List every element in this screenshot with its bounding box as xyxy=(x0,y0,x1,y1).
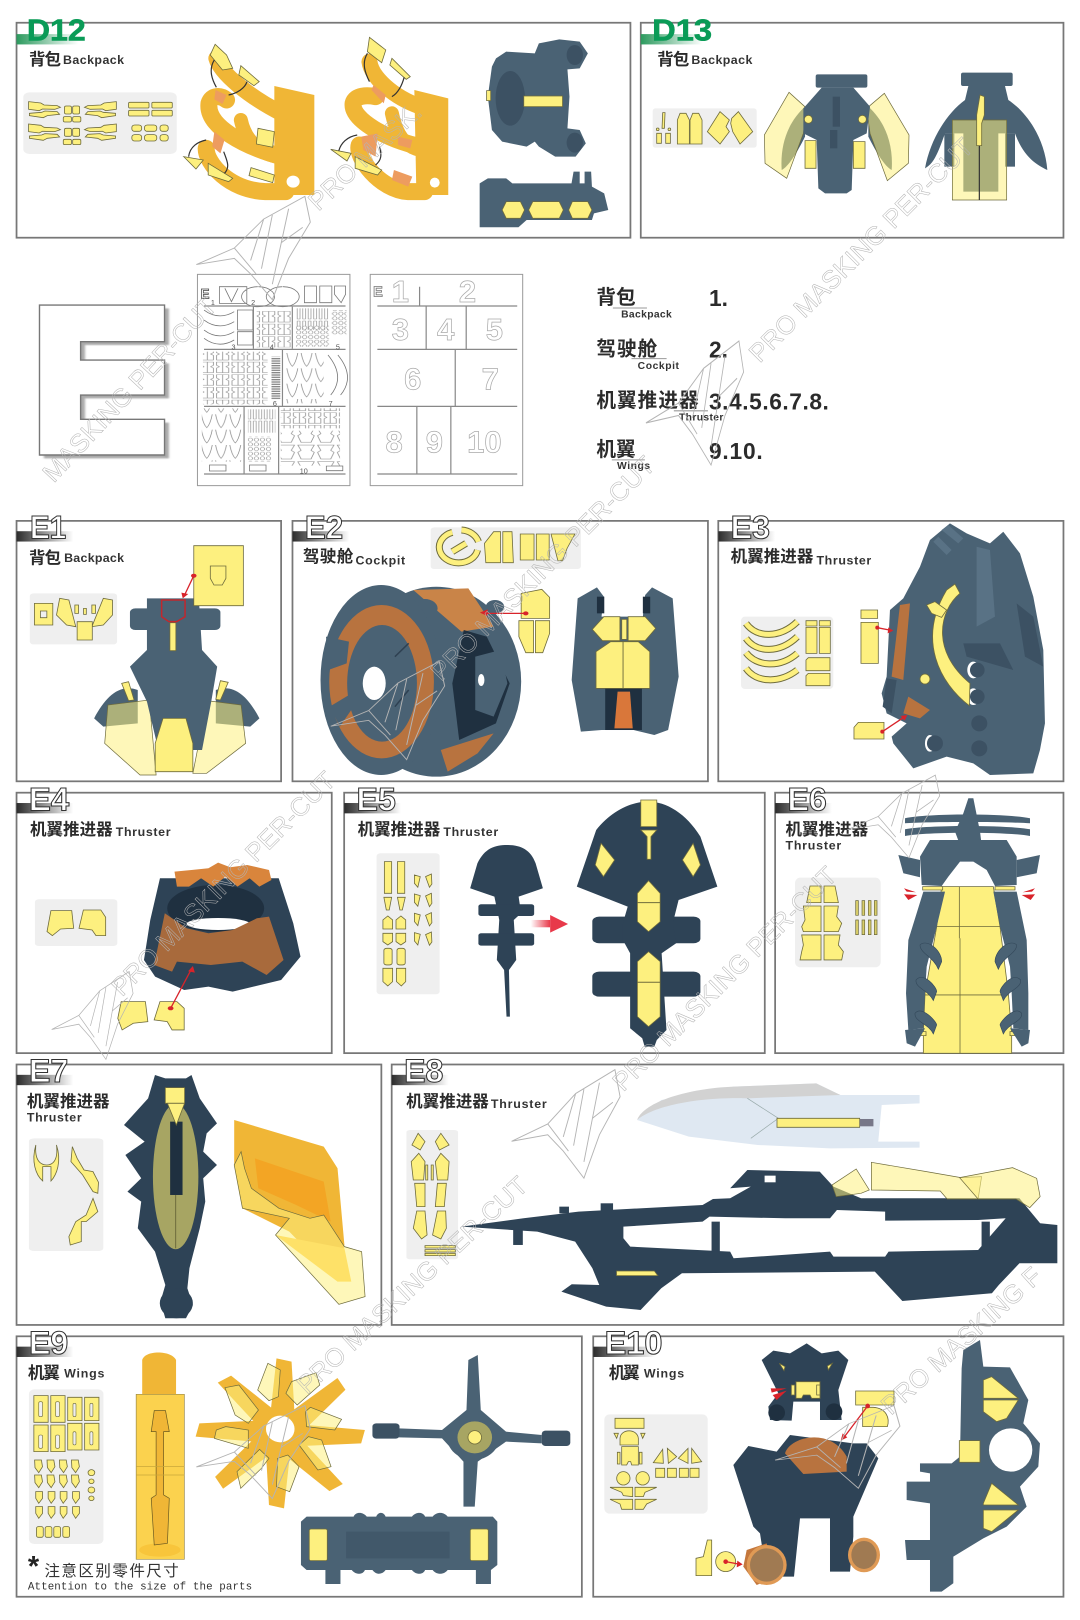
sheet of numbered sections: 4 xyxy=(437,312,455,347)
mask swatch D12 xyxy=(23,92,177,154)
panel titles: 机翼推进器 xyxy=(406,1092,489,1111)
size attention note: Attention to the size of the parts xyxy=(28,1582,252,1594)
sheet of numbered sections: 1 xyxy=(392,274,409,309)
mask E2 with arrow xyxy=(480,589,550,653)
sheet overview labels: 1 xyxy=(211,298,215,307)
panel titles: Cockpit xyxy=(356,553,405,567)
cockpit front view xyxy=(572,587,679,735)
orange part 2 xyxy=(331,37,448,195)
panel titles: Wings xyxy=(644,1367,684,1381)
mask swatch E5 xyxy=(377,853,440,994)
panel titles: 背包 xyxy=(657,49,690,69)
sheet of numbered sections: 5 xyxy=(486,312,503,347)
panel titles xyxy=(27,49,871,1383)
E7 thruster xyxy=(124,1075,217,1318)
sheet of numbered sections: 7 xyxy=(482,362,499,397)
E7 orange part with masks xyxy=(234,1120,365,1304)
sheet of numbered sections: 2 xyxy=(459,274,476,309)
panel: E4 and E5 parts xyxy=(35,800,717,1047)
legend: part name to section number: 背包 xyxy=(596,287,636,309)
mask swatch E4 xyxy=(35,899,117,946)
dark ring part xyxy=(487,39,588,157)
panel number labels: E2 xyxy=(305,509,343,545)
size attention note xyxy=(28,1551,252,1594)
panel: E3 parts xyxy=(741,523,1045,775)
thruster with masks xyxy=(898,798,1040,1053)
sheet overview labels: 7 xyxy=(329,399,333,408)
small thruster bars xyxy=(478,904,534,946)
legend: part name to section number: 机翼 xyxy=(596,439,636,461)
panel titles: Thruster xyxy=(443,825,498,839)
panel: D12 parts xyxy=(23,37,608,227)
sheet of numbered sections: 3 xyxy=(392,312,409,347)
sheet of numbered sections: 8 xyxy=(385,425,403,460)
masks E3 with arrows xyxy=(854,610,907,739)
E8 details and masks xyxy=(513,1162,1040,1276)
panel titles: Backpack xyxy=(691,53,752,67)
mask swatch E10 xyxy=(604,1414,708,1514)
mask swatch E2 xyxy=(431,527,581,569)
watermark text: PRO MASK. xyxy=(303,98,427,216)
panel: E9 parts xyxy=(29,1352,570,1584)
orange part 1 xyxy=(184,44,314,195)
panel titles: 机翼推进器 xyxy=(358,820,441,839)
slate cross part xyxy=(372,1355,570,1507)
panel titles: 驾驶舱 xyxy=(303,546,354,566)
dark holder with copper xyxy=(733,1435,880,1585)
sheet of numbered sections: 9 xyxy=(426,425,443,460)
watermark text: PRO MASKING F xyxy=(876,1262,1047,1420)
small dark part with red marks xyxy=(762,1343,848,1421)
panel number labels: E5 xyxy=(357,781,396,817)
large thruster with masks xyxy=(577,800,717,1047)
legend: part name to section number: 机翼推进器 xyxy=(596,390,699,412)
mask swatch E1 xyxy=(30,593,117,644)
masks and red arrow bottom xyxy=(696,1540,743,1576)
sheet overview labels: 5 xyxy=(336,342,340,351)
masks E4 with arrow xyxy=(118,966,195,1030)
sheet overview labels: 3 xyxy=(232,342,236,351)
sheet of numbered sections: 6 xyxy=(404,362,421,397)
panel titles: 机翼 xyxy=(28,1364,60,1383)
watermark logos xyxy=(52,196,940,1499)
panel number labels: E6 xyxy=(788,781,827,817)
panel titles: Thruster xyxy=(27,1110,82,1124)
sheet overview labels: 4 xyxy=(270,342,274,351)
panel titles: 机翼 xyxy=(609,1364,640,1383)
orange rod with mask xyxy=(136,1352,184,1559)
panel: D13 parts xyxy=(653,73,1047,200)
panel titles: Thruster xyxy=(491,1097,547,1111)
panel number labels xyxy=(27,12,827,1361)
size attention note: * xyxy=(28,1551,40,1583)
backpack part with masks xyxy=(94,598,259,775)
E8 long thruster body xyxy=(462,1170,1057,1310)
sheet overview labels: 10 xyxy=(300,466,308,475)
sheet overview labels: E xyxy=(200,287,209,302)
panel titles: Thruster xyxy=(785,839,841,853)
thruster cone xyxy=(144,863,301,992)
panel titles: Backpack xyxy=(63,53,124,67)
panel number labels: E9 xyxy=(29,1325,68,1361)
mask swatch E9 xyxy=(29,1389,103,1544)
mask swatch E7 xyxy=(29,1138,103,1251)
masks and red arrow top xyxy=(841,1391,894,1441)
panel titles: Backpack xyxy=(64,551,124,565)
panel: E10 parts xyxy=(604,1340,1040,1592)
mask swatch E3 xyxy=(741,617,833,689)
red arrow xyxy=(531,915,568,933)
panel titles: 机翼推进器 xyxy=(785,820,869,839)
panel titles: Wings xyxy=(64,1367,104,1381)
mask swatch E8 xyxy=(406,1130,458,1259)
legend: part name to section number: 驾驶舱 xyxy=(596,338,658,361)
size attention note: 注意区别零件尺寸 xyxy=(44,1561,179,1580)
watermark text: PRO MASKING PER-CUT xyxy=(608,862,843,1097)
sheet of numbered sections xyxy=(370,274,523,486)
legend: part name to section number: Cockpit xyxy=(638,361,680,372)
mask swatch E6 xyxy=(795,878,881,967)
panel number labels: E7 xyxy=(29,1053,68,1089)
panel number labels: E8 xyxy=(404,1053,443,1089)
panel: E6 parts xyxy=(795,798,1040,1053)
legend: part name to section number: 9.10. xyxy=(709,438,763,464)
legend: part name to section number: 2. xyxy=(709,337,728,363)
small thruster xyxy=(470,845,543,1017)
panel titles: 机翼推进器 xyxy=(27,1092,110,1111)
legend: part name to section number: Backpack xyxy=(621,309,672,320)
legend: part name to section number: Thruster xyxy=(679,413,723,424)
mask swatch D13 xyxy=(653,108,757,148)
cockpit wheel xyxy=(321,585,521,777)
watermark text xyxy=(38,98,1047,1420)
backpack rear with center mask xyxy=(925,73,1047,200)
panel number labels: D12 xyxy=(27,12,86,47)
panel number labels: E4 xyxy=(29,781,69,817)
thruster part xyxy=(882,523,1045,775)
panel number labels: E1 xyxy=(30,509,66,545)
panel titles: 背包 xyxy=(29,547,61,567)
panel titles: 机翼推进器 xyxy=(731,547,814,566)
sheet overview labels: 6 xyxy=(273,399,277,408)
watermark text: PRO MASKING PER-CUT xyxy=(292,1171,534,1400)
panel: E1 and E2 parts xyxy=(30,527,679,777)
panel titles: 背包 xyxy=(29,49,61,69)
slate side part with yellow masks xyxy=(905,1340,1040,1592)
panel number labels: D13 xyxy=(652,12,712,47)
sheet of numbered sections: 10 xyxy=(467,425,502,460)
mask sheet overview xyxy=(197,274,350,486)
big letter E xyxy=(39,305,169,458)
sheet of numbered sections: E xyxy=(373,285,383,301)
panel number labels: E10 xyxy=(605,1325,662,1361)
legend: part name to section number: 1. xyxy=(709,285,728,311)
panel titles: 机翼推进器 xyxy=(30,820,113,839)
watermark text: PRO MASKING PER-CUT xyxy=(426,451,661,686)
backpack front with side masks xyxy=(764,74,909,193)
legend: part name to section number: 3.4.5.6.7.8. xyxy=(709,388,829,414)
watermark text: MASKING PER-CUT xyxy=(38,292,223,488)
panel titles: Thruster xyxy=(816,553,871,567)
orange fan with masks xyxy=(196,1358,365,1508)
sheet overview labels: 2 xyxy=(251,298,255,307)
legend: part name to section number: Wings xyxy=(617,461,650,472)
slate block with yellow masks xyxy=(301,1513,497,1584)
E8 white wing xyxy=(637,1083,920,1148)
mask with arrow xyxy=(181,546,243,606)
panel: E7 and E8 parts xyxy=(29,1075,1057,1318)
watermark text: PRO MASKING PER-CUT xyxy=(106,766,341,1002)
panel titles: Thruster xyxy=(116,825,171,839)
dark bar part xyxy=(480,172,608,227)
legend: part name to section number xyxy=(596,285,829,472)
panel number labels: E3 xyxy=(731,509,770,545)
watermark text: PRO MASKING PER-CUT xyxy=(744,133,979,368)
sheet overview labels xyxy=(200,287,340,475)
